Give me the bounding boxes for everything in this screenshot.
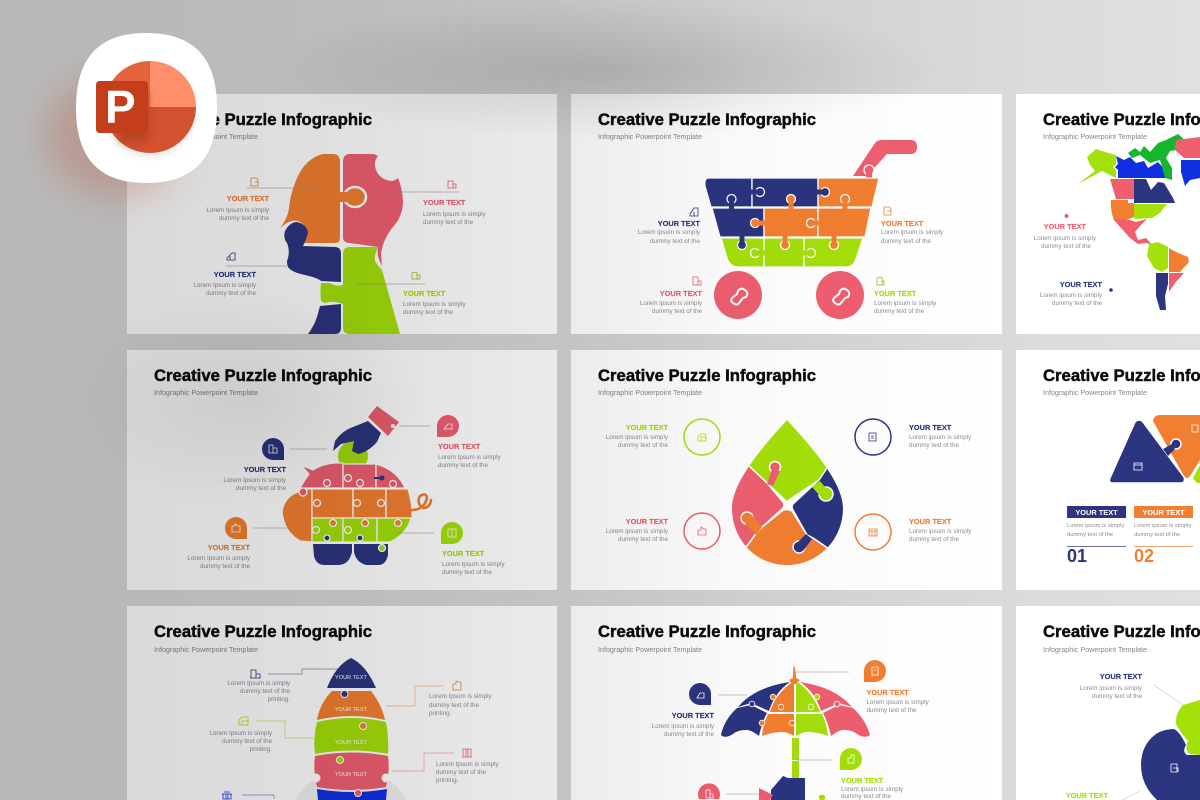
- callout: pink: YOUR TEXT: [1044, 222, 1086, 231]
- callout: green: dummy text of the: [874, 308, 925, 315]
- callout: orange: Lorem Ipsum is simply: [429, 693, 492, 700]
- callout: pink: [391, 181, 486, 226]
- callout: pink: Lorem Ipsum is simply: [423, 211, 486, 218]
- callout: navy: Lorem ipsum is simply: [1040, 292, 1103, 299]
- slide 1 subtitle: Infographic Powerpoint Template: [154, 132, 258, 141]
- slide 8 title: Creative Puzzle Infographic: [598, 622, 816, 641]
- callout: orange: [386, 681, 492, 717]
- callout: pink: YOUR TEXT: [626, 517, 668, 526]
- callout: navy: dummy text of the: [1092, 693, 1142, 700]
- callout: orange: [881, 207, 944, 245]
- callout: green bubble: Lorem ipsum is simply: [841, 786, 904, 793]
- callout: orange: [855, 514, 972, 550]
- callout: navy: [638, 208, 701, 245]
- callout: pink bubble: Lorem Ipsum is simply: [438, 454, 501, 461]
- callout: navy bubble: dummy text of the: [664, 731, 714, 738]
- callout: navy: YOUR TEXT: [909, 423, 952, 432]
- callout: navy: Lorem ipsum is simply: [638, 229, 701, 236]
- callout: orange bubble: dummy text of the: [866, 707, 917, 714]
- panel: slide 4 piggy bank: [127, 350, 557, 590]
- umbrella puzzle chart: [721, 665, 870, 800]
- callout: green: Lorem ipsum is simply: [606, 434, 669, 441]
- rocket label 1: YOUR TEXT: [335, 675, 368, 681]
- panel: slide 2 shopping cart: [571, 94, 1002, 334]
- callout: lime: [209, 717, 314, 753]
- callout: pink: [606, 513, 720, 549]
- slide 2 title: Creative Puzzle Infographic: [598, 110, 816, 129]
- callout: orange: dummy text of the: [219, 215, 269, 222]
- callout: navy: [855, 419, 972, 455]
- column 02: [1134, 506, 1193, 566]
- callout: green: [874, 277, 937, 315]
- slide 7 subtitle: Infographic Powerpoint Template: [154, 645, 258, 654]
- panel: slide 6 triangles: [1016, 350, 1200, 590]
- slide 5 subtitle: Infographic Powerpoint Template: [598, 388, 702, 397]
- callout: pink: [640, 277, 703, 315]
- slide 6 subtitle: Infographic Powerpoint Template: [1043, 388, 1147, 397]
- column 02: dummy text of the: [1134, 532, 1180, 538]
- callout: pink: Lorem ipsum is simply: [606, 528, 669, 535]
- cart puzzle chart: [705, 140, 917, 267]
- column 01: Lorem ipsum is simply: [1067, 523, 1124, 529]
- callout: navy: printing.: [268, 696, 290, 703]
- callout: navy: dummy text of the: [909, 442, 960, 449]
- icon: PowerPoint app logo: [45, 33, 217, 197]
- panel: slide 9 circle puzzle: [1016, 606, 1200, 800]
- callout: green: dummy text of the: [403, 309, 454, 316]
- callout: navy: YOUR TEXT: [214, 270, 256, 279]
- callout: navy bubble: Lorem Ipsum is simply: [223, 477, 287, 484]
- callout: green: dummy text of the: [618, 442, 668, 449]
- callout: pink: Lorem ipsum is simply: [640, 300, 703, 307]
- callout: navy: dummy text of the: [206, 290, 256, 297]
- callout: green bubble: dummy text of the: [442, 569, 493, 576]
- callout: pink bubble: [399, 415, 501, 469]
- slide 7 title: Creative Puzzle Infographic: [154, 622, 372, 641]
- slide 9 subtitle: Infographic Powerpoint Template: [1043, 645, 1147, 654]
- callout: navy bubble: YOUR TEXT: [244, 465, 286, 474]
- triangle puzzle chart: [1109, 415, 1200, 483]
- callout: pink: printing.: [436, 777, 459, 784]
- callout: orange: Lorem ipsum is simply: [909, 528, 972, 535]
- callout: navy: YOUR TEXT: [1100, 672, 1142, 681]
- callout: pink: YOUR TEXT: [660, 289, 702, 298]
- callout: lime: printing.: [250, 746, 272, 753]
- callout: green: Lorem Ipsum is simply: [403, 301, 466, 308]
- slide 3 subtitle: Infographic Powerpoint Template: [1043, 132, 1147, 141]
- slide 8 subtitle: Infographic Powerpoint Template: [598, 645, 702, 654]
- callout: green bubble: Lorem Ipsum is simply: [442, 561, 505, 568]
- panel: slide 5 water drop: [571, 350, 1002, 600]
- callout: green bubble: [397, 522, 505, 576]
- column 01: [1067, 506, 1126, 566]
- slide 4 subtitle: Infographic Powerpoint Template: [154, 388, 258, 397]
- callout: green bubble: dummy text of the: [841, 793, 892, 800]
- callout: green bubble: YOUR TEXT: [442, 549, 485, 558]
- callout: orange: dummy text of the: [909, 536, 960, 543]
- callout: orange bubble: [796, 660, 930, 714]
- backdrop circle: [296, 767, 406, 800]
- callout: navy: YOUR TEXT: [658, 219, 700, 228]
- callout: navy bubble: [223, 438, 327, 492]
- PowerPoint letter: P: [105, 81, 136, 133]
- callout: orange bubble: Lorem ipsum is simply: [866, 699, 930, 706]
- callout: navy: dummy text of the: [650, 238, 700, 245]
- panel: slide 1 head puzzle: [127, 94, 557, 334]
- panel: slide 3 map: [1016, 94, 1200, 334]
- column 02: YOUR TEXT: [1142, 508, 1185, 517]
- callout: navy bubble: Lorem ipsum is simply: [652, 723, 715, 730]
- callout: navy: [227, 669, 338, 703]
- callout: pink: Lorem Ipsum is simply: [436, 761, 499, 768]
- callout: pink bubble: [698, 783, 759, 800]
- callout: orange: Lorem ipsum is simply: [881, 229, 944, 236]
- callout: navy: dummy text of the: [240, 688, 290, 695]
- column 01: 01: [1067, 546, 1087, 566]
- callout: orange: [206, 178, 314, 222]
- panel: slide 7 rocket: [127, 606, 557, 800]
- callout: orange bubble: [187, 517, 290, 570]
- left wheel: [714, 271, 762, 319]
- column 01: dummy text of the: [1067, 532, 1113, 538]
- piggy bank puzzle chart: [282, 406, 431, 565]
- slide 1 title: Creative Puzzle Infographic: [154, 110, 372, 129]
- callout: orange: dummy text of the: [881, 238, 932, 245]
- callout: orange: YOUR TEXT: [909, 517, 952, 526]
- slide 2 subtitle: Infographic Powerpoint Template: [598, 132, 702, 141]
- slide 4 title: Creative Puzzle Infographic: [154, 366, 372, 385]
- callout: lime: Lorem Ipsum is simply: [209, 730, 273, 737]
- callout: blue: [222, 792, 274, 799]
- callout: orange: dummy text of the: [429, 702, 480, 709]
- callout: navy: Lorem Ipsum is simply: [193, 282, 257, 289]
- rocket puzzle chart: [312, 658, 390, 800]
- rocket label 4: YOUR TEXT: [335, 772, 368, 778]
- callout: navy bubble: dummy text of the: [236, 485, 286, 492]
- callout: pink bubble: YOUR TEXT: [438, 442, 481, 451]
- callout: navy: [193, 253, 287, 297]
- head puzzle chart: [280, 154, 403, 334]
- callout: green bubble: YOUR TEXT: [841, 776, 884, 785]
- callout: navy: [1080, 672, 1143, 700]
- callout: pink: dummy text of the: [618, 536, 668, 543]
- callout: orange: YOUR TEXT: [227, 194, 269, 203]
- callout: green: [357, 272, 466, 316]
- callout: orange: Lorem Ipsum is simply: [206, 207, 270, 214]
- callout: pink: dummy text of the: [423, 219, 474, 226]
- callout: pink: dummy text of the: [652, 308, 702, 315]
- callout: navy: YOUR TEXT: [1060, 280, 1102, 289]
- column 02: 02: [1134, 546, 1154, 566]
- callout: lime: dummy text of the: [222, 738, 272, 745]
- callout: pink: [1034, 214, 1097, 250]
- callout: orange bubble: dummy text of the: [200, 563, 250, 570]
- callout: navy: [1040, 280, 1113, 307]
- right wheel: [816, 271, 864, 319]
- callout: pink: [392, 749, 499, 784]
- callout: pink bubble: dummy text of the: [438, 462, 489, 469]
- callout: navy bubble: [652, 683, 747, 738]
- rocket label 2: YOUR TEXT: [335, 707, 368, 713]
- callout: navy: Lorem ipsum is simply: [909, 434, 972, 441]
- callout: orange: printing.: [429, 710, 452, 717]
- callout: green: YOUR TEXT: [874, 289, 917, 298]
- rocket label 3: YOUR TEXT: [335, 740, 368, 746]
- water drop puzzle chart: [732, 420, 843, 565]
- column 02: Lorem ipsum is simply: [1134, 523, 1191, 529]
- callout: green: [606, 419, 720, 455]
- callout: green bubble: [796, 748, 904, 800]
- callout: orange bubble: Lorem Ipsum is simply: [187, 555, 251, 562]
- callout: pink: dummy text of the: [436, 769, 487, 776]
- callout: pink: Lorem ipsum is simply: [1034, 235, 1097, 242]
- callout: navy: Lorem Ipsum is simply: [227, 680, 291, 687]
- callout: pink: YOUR TEXT: [423, 198, 466, 207]
- panel: slide 8 umbrella: [571, 606, 1002, 800]
- callout: pink: dummy text of the: [1041, 243, 1091, 250]
- callout: navy: dummy text of the: [1052, 300, 1102, 307]
- slide 5 title: Creative Puzzle Infographic: [598, 366, 816, 385]
- callout: orange bubble: YOUR TEXT: [208, 543, 250, 552]
- callout: lime: YOUR TEXT: [1066, 791, 1108, 800]
- callout: green: YOUR TEXT: [403, 289, 446, 298]
- americas puzzle map: [1078, 134, 1200, 310]
- callout: green: YOUR TEXT: [626, 423, 668, 432]
- callout: navy: Lorem ipsum is simply: [1080, 685, 1143, 692]
- callout: navy bubble: YOUR TEXT: [672, 711, 714, 720]
- column 01: YOUR TEXT: [1075, 508, 1118, 517]
- callout: orange: YOUR TEXT: [881, 219, 924, 228]
- circle puzzle chart: [1122, 685, 1200, 800]
- callout: orange bubble: YOUR TEXT: [866, 688, 909, 697]
- callout: green: Lorem ipsum is simply: [874, 300, 937, 307]
